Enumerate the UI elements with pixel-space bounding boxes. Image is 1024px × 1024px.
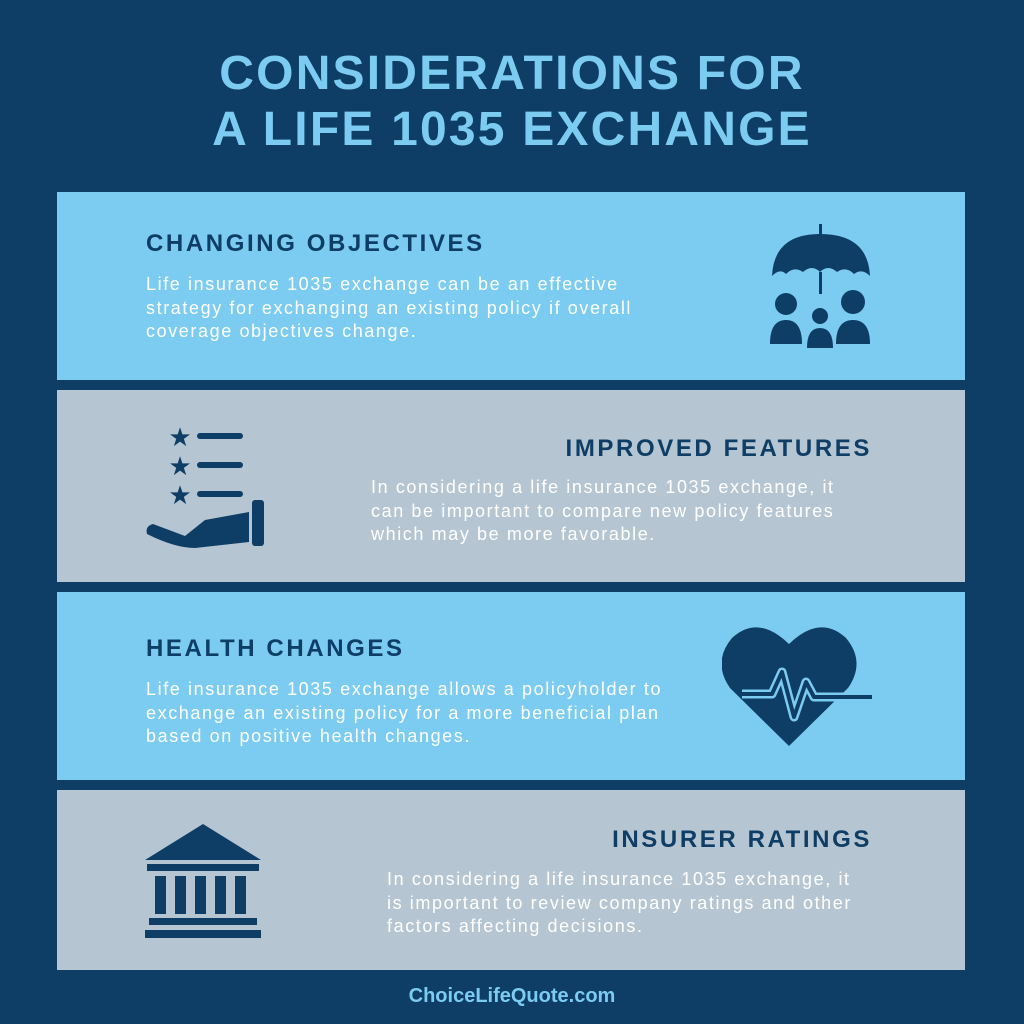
text block: In considering a life insurance 1035 exchange, it [387,869,851,889]
text block: based on positive health changes. [146,726,471,746]
panel: health changes [57,592,965,780]
icon: bank building [145,824,261,938]
icon: stars in hand [146,424,264,548]
text block: In considering a life insurance 1035 exchange, it [371,477,835,497]
text block: is important to review company ratings and other [387,892,852,912]
heading: IMPROVED FEATURES [566,435,872,462]
footer: ChoiceLifeQuote.com [409,985,615,1007]
icon: stars in hand: ★ [168,451,192,481]
text block: can be important to compare new policy features [371,500,834,520]
panel: changing objectives [57,192,965,380]
text block [387,869,852,936]
title: A LIFE 1035 EXCHANGE [212,103,812,156]
panel: insurer ratings [57,790,965,970]
text block: which may be more favorable. [371,524,656,544]
text block: Life insurance 1035 exchange can be an effective [146,274,619,294]
text block [146,274,632,341]
text block: coverage objectives change. [146,321,417,341]
title [212,47,812,156]
icon: stars in hand: ★ [168,480,192,510]
title: CONSIDERATIONS FOR [219,47,805,100]
heading: HEALTH CHANGES [146,635,405,662]
icon: umbrella family [770,224,870,348]
text block: factors affecting decisions. [387,916,644,936]
heading: INSURER RATINGS [612,826,872,853]
text block: strategy for exchanging an existing policy if overall [146,298,632,318]
panel: improved features [57,390,965,582]
text block: Life insurance 1035 exchange allows a policyholder to [146,679,662,699]
text block [371,477,835,544]
heading: CHANGING OBJECTIVES [146,230,485,257]
text block: exchange an existing policy for a more beneficial plan [146,702,660,722]
text block [146,679,662,746]
icon: heart pulse [722,627,872,746]
